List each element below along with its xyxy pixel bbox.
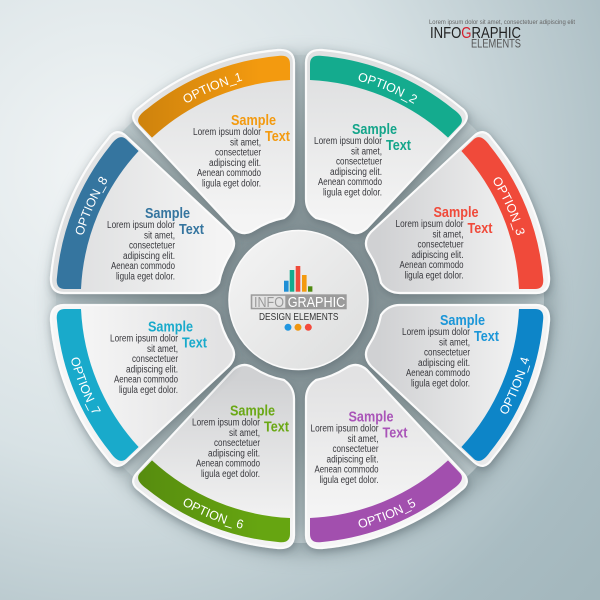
colour band xyxy=(138,56,290,138)
header: infographic elements xyxy=(429,19,575,50)
panel: option 5 xyxy=(302,364,471,555)
panel text: sit amet, xyxy=(144,230,175,241)
card shape xyxy=(366,132,549,293)
panel text: sit amet, xyxy=(348,434,378,445)
panel text: Lorem ipsum dolor xyxy=(314,136,383,147)
hub subtitle: DESIGN ELEMENTS xyxy=(259,311,338,323)
band label: OPTION_ 6 xyxy=(184,498,244,528)
panel text: Sample xyxy=(434,205,478,221)
panel text: adipiscing elit. xyxy=(123,251,175,262)
hub dots xyxy=(284,324,312,331)
panel text xyxy=(107,206,204,282)
panel text: consectetuer xyxy=(332,444,379,455)
panel text: ligula eget dolor. xyxy=(119,385,178,396)
panel text: Lorem ipsum dolor xyxy=(110,334,179,344)
wheel shadow disc xyxy=(54,55,554,555)
panel: option 8 xyxy=(47,130,238,300)
panel text: ligula eget dolor. xyxy=(116,271,175,282)
panel text xyxy=(396,205,493,281)
panel text: Text xyxy=(382,426,408,442)
panel text: Lorem ipsum dolor xyxy=(396,219,464,230)
hub banner xyxy=(251,294,347,311)
panel text xyxy=(402,313,499,389)
header subtitle: ELEMENTS xyxy=(471,36,521,50)
panel text: sit amet, xyxy=(432,229,464,240)
panel text: Aenean commodo xyxy=(114,374,178,386)
panel text: Text xyxy=(182,336,207,352)
panel text: Lorem ipsum dolor xyxy=(310,424,379,434)
panel text: ligula eget dolor. xyxy=(320,475,378,486)
center hub xyxy=(229,230,368,370)
panel: option 4 xyxy=(364,304,554,472)
band label: OPTION_8 xyxy=(76,176,107,234)
panel text: Aenean commodo xyxy=(406,368,470,379)
panel text: Lorem ipsum dolor xyxy=(193,127,262,138)
band label: OPTION_7 xyxy=(72,358,101,412)
panel text: consectetuer xyxy=(132,354,179,365)
panel text xyxy=(310,410,408,486)
panel text: Sample xyxy=(145,206,190,222)
panel text: adipiscing elit. xyxy=(126,364,178,375)
panel text: adipiscing elit. xyxy=(412,250,464,261)
panel text xyxy=(192,404,289,480)
panel text: consectetuer xyxy=(214,438,261,449)
panel text: Lorem ipsum dolor xyxy=(402,327,471,338)
panel text: Sample xyxy=(231,113,276,129)
panel text: Text xyxy=(265,129,290,145)
panel text xyxy=(314,122,411,198)
band label: OPTION_4 xyxy=(500,358,530,414)
panel text: adipiscing elit. xyxy=(326,454,378,465)
icon: bar chart xyxy=(284,266,312,292)
panel text: ligula eget dolor. xyxy=(411,378,470,389)
card shape xyxy=(133,50,294,233)
panel text: ligula eget dolor. xyxy=(202,178,261,189)
panel text xyxy=(193,113,290,189)
panel text: sit amet, xyxy=(439,337,470,348)
card shape xyxy=(133,365,294,548)
panel: option 2 xyxy=(302,48,472,238)
panel text: ligula eget dolor. xyxy=(404,270,464,281)
panel text xyxy=(110,320,207,396)
colour band xyxy=(461,137,543,289)
colour band xyxy=(310,460,462,542)
hub banner: GRAPHIC xyxy=(288,294,345,311)
colour band xyxy=(461,309,543,461)
panel: option 7 xyxy=(47,304,238,473)
panel text: adipiscing elit. xyxy=(418,358,470,369)
panel text: Aenean commodo xyxy=(196,458,260,470)
panel text: Sample xyxy=(440,313,485,329)
colour band xyxy=(310,56,462,138)
panel text: sit amet, xyxy=(351,146,382,157)
panel text: Sample xyxy=(348,410,394,426)
panel text: Text xyxy=(468,221,493,237)
header tagline: Lorem ipsum dolor sit amet, consectetuer adipiscing elit xyxy=(429,19,575,26)
panel text: ligula eget dolor. xyxy=(201,469,260,480)
colour band xyxy=(138,460,290,542)
panel text: adipiscing elit. xyxy=(208,448,260,459)
panel text: Text xyxy=(474,329,499,345)
colour band xyxy=(57,309,139,461)
panel: option 1 xyxy=(130,48,300,238)
panel text: consectetuer xyxy=(129,240,176,252)
panel text: sit amet, xyxy=(230,137,261,148)
panel text: Lorem ipsum dolor xyxy=(107,220,176,231)
card shape xyxy=(366,305,549,466)
card shape xyxy=(306,50,467,233)
panel text: Sample xyxy=(230,404,275,420)
band label: OPTION_3 xyxy=(494,177,524,235)
card shape xyxy=(51,305,234,466)
band label: OPTION_5 xyxy=(358,498,416,528)
hub disc xyxy=(229,230,368,370)
panel text: consectetuer xyxy=(336,156,383,168)
panel text: adipiscing elit. xyxy=(330,167,382,178)
band label: OPTION_1 xyxy=(184,72,242,102)
header title: INFOGRAPHIC xyxy=(430,25,521,42)
colour band xyxy=(57,137,139,289)
panel text: sit amet, xyxy=(147,344,178,355)
panel: option 6 xyxy=(130,364,300,556)
panel text: consectetuer xyxy=(424,348,471,358)
band label: OPTION_2 xyxy=(358,73,417,104)
panel text: Aenean commodo xyxy=(197,168,261,179)
panel text: consectetuer xyxy=(418,240,464,250)
panel text: Aenean commodo xyxy=(318,177,382,188)
card shape xyxy=(51,132,234,293)
panel text: Lorem ipsum dolor xyxy=(192,418,261,428)
panel text: Aenean commodo xyxy=(314,464,379,476)
panel text: adipiscing elit. xyxy=(209,158,261,169)
panel text: Text xyxy=(179,222,204,238)
panel: option 3 xyxy=(364,131,554,300)
panel text: Sample xyxy=(352,122,397,138)
panel text: Aenean commodo xyxy=(400,260,464,271)
panel text: sit amet, xyxy=(229,428,260,439)
panel text: consectetuer xyxy=(215,148,262,158)
panel text: ligula eget dolor. xyxy=(323,187,382,198)
panel text: Text xyxy=(264,420,289,436)
card shape xyxy=(306,365,467,548)
panel text: Sample xyxy=(148,320,193,336)
hub banner: INFO xyxy=(254,294,284,311)
panel text: Aenean commodo xyxy=(111,261,175,272)
panel text: Text xyxy=(386,138,411,154)
